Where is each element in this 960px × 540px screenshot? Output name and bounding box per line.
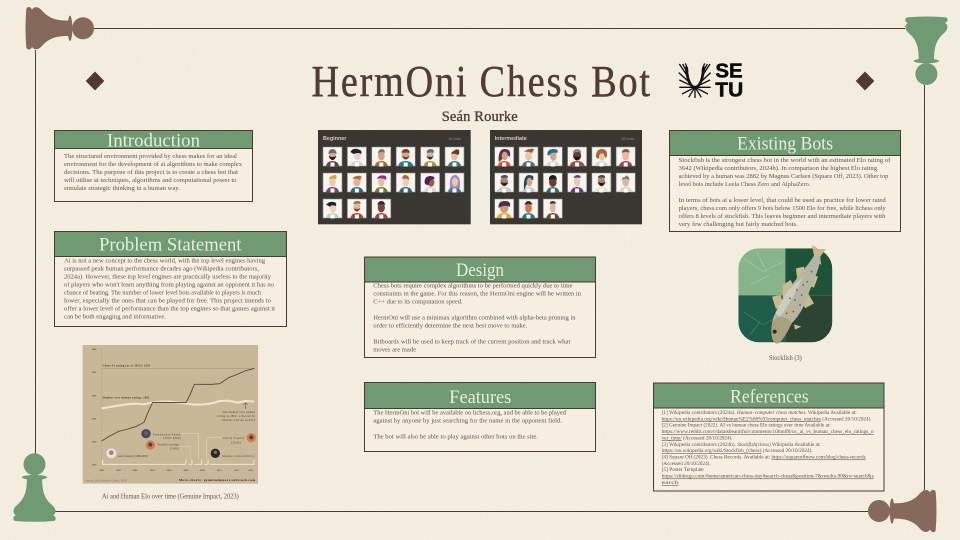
text: references list: https://www.reddit.com/r/dataisbeautiful/comments/10hmlf8/oc_ai_vs_human_chess_elo_ratings_o <box>662 428 874 435</box>
text: existing bots body: very few challenging but fairly matched bots. <box>679 221 798 228</box>
caption: stockfish: Stockfish (3) <box>769 355 802 362</box>
chart annotations: Magnus Carlsen (2013-) <box>222 455 254 458</box>
icon: brown pawn top left <box>26 7 94 50</box>
author: Seán Rourke <box>442 109 518 125</box>
text: references list <box>662 409 874 486</box>
axis labels: 2006 <box>183 469 189 472</box>
axis labels: 2008 <box>200 469 205 472</box>
logo wordmark: TU <box>715 79 743 102</box>
chart annotations: (2007-2008) <box>163 437 181 440</box>
axis labels: 2021 <box>248 469 254 472</box>
axis labels: 1500 <box>92 463 97 466</box>
text: existing bots body: In terms of bots at a lower level, that could be used as practice for lower rated <box>679 197 887 204</box>
logo wordmark <box>715 60 743 102</box>
panel: features <box>364 382 596 452</box>
logo: SETU <box>679 60 743 102</box>
heading: introduction: Introduction <box>107 131 200 152</box>
axis labels: 2015 <box>234 469 240 472</box>
logo mark <box>679 63 711 98</box>
axis labels: 2003 <box>167 469 172 472</box>
icon: brown pawn bottom right <box>868 490 936 532</box>
panel: introduction <box>54 130 252 202</box>
text: introduction body: decisions. The purpose of this project is to create a chess bot that <box>64 169 238 176</box>
text: design body: order to efficiently determine the next best move to make. <box>373 323 528 330</box>
text: existing bots body: players, chess.com only offers 9 bots below 1500 Elo for free, while lichess only <box>679 205 887 212</box>
text: references list: earch <box>662 480 679 486</box>
text: design body: constraints in the game. For this reason, the HermOni engine will be written in <box>373 291 582 298</box>
icon: green pawn top right <box>905 17 948 85</box>
chart annotations: Vassily Topalov <box>222 437 245 440</box>
text: existing bots body: level bots include Leela Chess Zero and AlphaZero. <box>679 181 811 188</box>
chart annotations: The highest ever human <box>222 411 256 414</box>
chart portraits <box>106 429 256 458</box>
avatars: beginner <box>323 147 464 218</box>
fish body <box>771 245 826 344</box>
text: references list: (Accessed 20/10/2024). <box>662 460 711 467</box>
axis labels: 2000 <box>133 469 138 472</box>
text: problem statement body: lower, especially the ones that can be played for free. This project intends to <box>64 297 271 304</box>
panel: problem statement <box>54 232 286 326</box>
chart annotations: Magnus Carlsen in 2014 <box>222 419 256 422</box>
text: existing bots body <box>679 157 891 228</box>
axis labels: 2001 <box>150 469 155 472</box>
panel: design <box>364 257 596 358</box>
axis labels <box>92 348 254 472</box>
text: introduction body: environment for the development of ai algorithms to make complex <box>64 161 243 168</box>
heading: design: Design <box>456 260 504 281</box>
text: features body: against by anyone by just searching for the name in the opponent field. <box>373 418 562 425</box>
heading: problem statement: Problem Statement <box>99 235 242 256</box>
text: problem statement body <box>64 257 275 320</box>
heading: references: References <box>730 386 809 407</box>
caption: chart: Ai and Human Elo over time (Genuine Impact, 2023) <box>102 494 239 501</box>
chart annotations: More charts: genuineimpact.substack.com <box>179 478 256 482</box>
text: problem statement body: can be both engaging and informative. <box>64 313 166 320</box>
chart annotations: Garry Kasparov (1996-2005) <box>118 455 148 458</box>
icon: left diamond <box>86 72 104 90</box>
text: references list: https://en.wikipedia.org/wiki/Human%E2%80%93computer_chess_matches (Accessed 20/10/2024). <box>662 415 872 422</box>
chart annotations: Vassily Ivanchuk <box>157 444 179 447</box>
icon: stockfish logo <box>738 245 832 344</box>
text: design body: Bitboards will be used to keep track of the current position and track what <box>373 339 571 346</box>
chart annotations: (2006) <box>231 441 241 444</box>
chart annotations: Source: Dan Martin's Glicko, FIDE <box>85 480 127 483</box>
text: features body: The HermOni bot will be available on lichess.org, and be able to be played <box>373 410 567 417</box>
text: design body <box>373 283 582 354</box>
axis labels: 3000 <box>92 394 97 397</box>
chart annotations <box>85 365 256 483</box>
text: references list: [4] Square Off (2023). Chess Records. Available at: https://squareoffnow.com/blog/chess-records <box>662 454 866 460</box>
label: beginner: Beginner <box>323 136 347 142</box>
text: references list: ver_time/ (Accessed 20/10/2024). <box>662 434 733 441</box>
heading: existing bots: Existing Bots <box>737 134 833 155</box>
label: intermediate: Intermediate <box>495 136 527 142</box>
chart annotations: rating is 2882, achieved by <box>217 415 256 418</box>
text: problem statement body: chance of beating. The number of lower level bots available to players is much <box>64 289 262 296</box>
text: references list: https://en.wikipedia.org/wiki/Stockfish_(chess) (Accessed 20/10/2024). <box>662 447 813 454</box>
text: problem statement body: of players who won't learn anything from playing against an opponent it has no <box>64 281 274 288</box>
chart: AI and human Elo over time <box>83 345 258 484</box>
text: references list: [1] Wikipedia contributors (2024a). Human–computer chess matches. Wikipedia Available at: <box>662 409 857 416</box>
panel: beginner bots screenshot <box>318 130 471 224</box>
axis labels: 2012 <box>217 469 222 472</box>
text: problem statement body: surpassed peak human performance decades ago (Wikipedia contributors, <box>64 265 259 272</box>
icon: green pawn bottom left <box>13 453 56 522</box>
line: chess AI rating <box>102 368 254 441</box>
text: introduction body: will utilise ai techniques, algorithms and computational power to <box>64 177 236 184</box>
axis labels: 1998 <box>116 469 121 472</box>
text: design body: moves are made <box>373 347 416 354</box>
text: problem statement body: Ai is not a new concept to the chess world, with the top level engines having <box>64 257 266 264</box>
heading: features: Features <box>449 387 511 408</box>
axis labels: 2500 <box>92 417 97 420</box>
text: existing bots body: achieved by a human was 2882 by Magnus Carlsen (Square Off, 2023). Other top <box>679 173 888 180</box>
text: introduction body: The structured environment provided by chess makes for an ideal <box>64 153 237 160</box>
text: references list: https://slidesgo.com/theme/american-chess-day#search-chess&position-7&results-90&rs=search&s <box>662 474 874 480</box>
text: features body: The bot will also be able to play against other bots on the site. <box>373 434 538 441</box>
text: features body <box>373 410 567 441</box>
text: problem statement body: offer a lower level of performance than the top engines so that games against it <box>64 305 275 312</box>
panel: references <box>654 383 884 491</box>
icon: right diamond <box>856 72 874 90</box>
axis labels: 2000 <box>92 440 97 443</box>
text: existing bots body: offers 8 levels of stockfish. This leaves beginner and intermediate players with <box>679 213 886 220</box>
axis labels: 4000 <box>92 348 97 351</box>
chart annotations: Chess AI rating (as of 2023): 3550 <box>103 365 151 368</box>
line: highest human rating <box>102 401 254 408</box>
logo wordmark: SE <box>715 60 743 83</box>
chart annotations: Highest ever human rating: 2882 <box>103 397 150 400</box>
text: introduction body <box>64 153 243 192</box>
label: beginner bot count: 15 bots <box>448 136 461 141</box>
text: design body: C++ due to its computation speed. <box>373 299 463 306</box>
panel: intermediate bots screenshot <box>490 130 642 224</box>
panel: existing bots <box>670 130 900 232</box>
text: existing bots body: Stockfish is the strongest chess bot in the world with an estimated Elo rating of <box>679 157 891 164</box>
text: existing bots body: 3642 (Wikipedia contributors, 2024b). In comparison the highest Elo rating <box>679 165 878 172</box>
text: references list: [2] Genuine Impact (2022). AI vs human chess Elo ratings over time Available at: <box>662 422 831 429</box>
text: references list: [3] Wikipedia contributors (2024b). Stockfish(chess) Wikipedia Available at: <box>662 441 821 448</box>
axis labels: 1995 <box>99 469 105 472</box>
text: introduction body: simulate strategic thinking in a human way. <box>64 185 180 192</box>
text: design body: HermOni will use a minimax algorithm combined with alpha-beta pruning in <box>373 315 576 322</box>
label: intermediate bot count: 15 bots <box>621 136 634 141</box>
text: problem statement body: 2024a). However, these top level engines are practically useless to the majority <box>64 273 272 280</box>
chart annotations: (1900) <box>170 448 179 451</box>
text: references list: [5] Poster Template <box>662 467 704 473</box>
chart annotations: Viswanathan Anand <box>153 433 181 436</box>
text: design body: Chess bots require complex algorithms to be performed quickly due to time <box>373 283 573 290</box>
avatars: intermediate <box>495 147 635 218</box>
title: HermOni Chess Bot <box>312 56 650 106</box>
axis labels: 3500 <box>92 371 97 374</box>
